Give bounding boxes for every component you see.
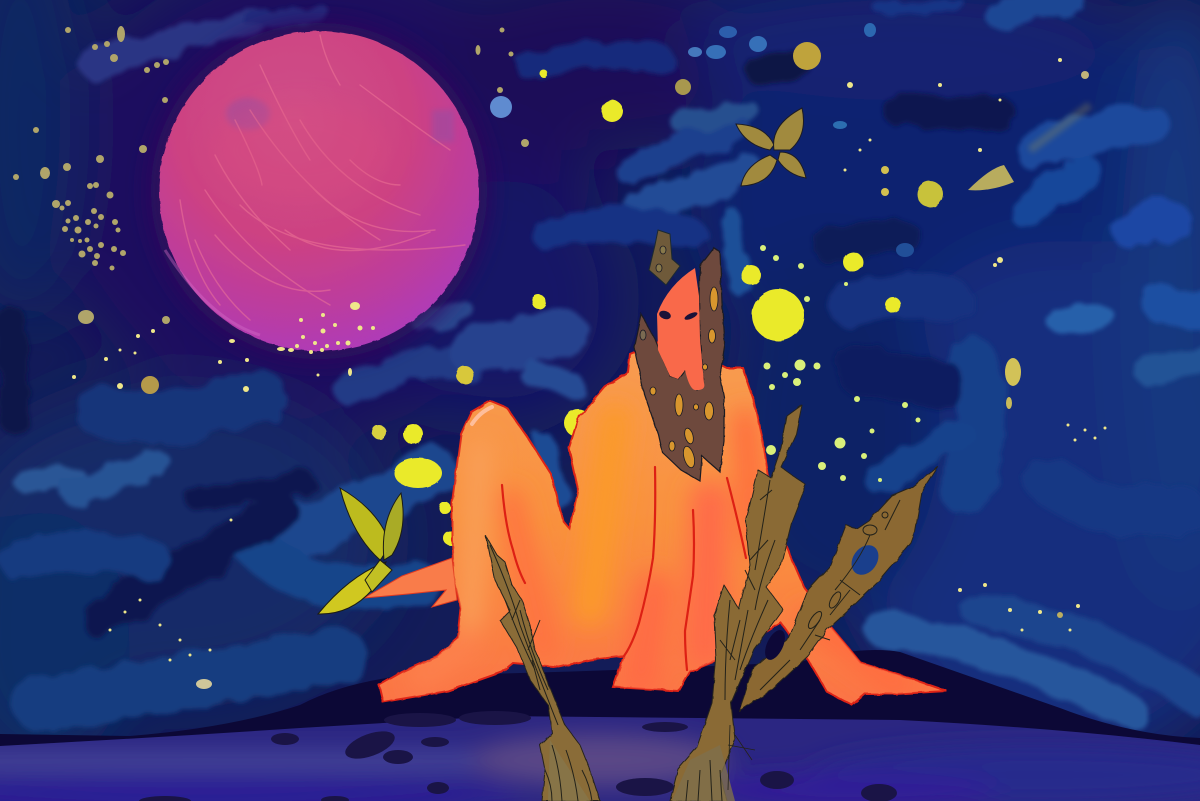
arm	[364, 558, 457, 607]
plant: right stalks	[670, 405, 938, 801]
stars: yellow glowing orbs	[372, 70, 943, 545]
body	[379, 339, 947, 705]
knee highlight	[472, 407, 492, 424]
back horn	[649, 230, 680, 285]
beard	[634, 248, 725, 481]
figure: seated orange creature	[364, 230, 947, 705]
moon glow	[151, 23, 487, 359]
butterfly: yellow near hand	[318, 488, 403, 614]
stalk: base tuft	[672, 745, 735, 801]
body colour washes	[420, 420, 900, 685]
ground	[0, 716, 1200, 801]
moon	[159, 31, 479, 351]
feather marks	[686, 480, 900, 801]
stalk: right leaning	[739, 467, 938, 711]
head	[657, 268, 704, 390]
eyes	[658, 309, 698, 321]
red contour lines	[502, 467, 746, 670]
stalk: tall centre	[670, 405, 806, 801]
hill silhouette	[0, 650, 1200, 760]
ground: stones	[139, 711, 897, 801]
stars: tan dust on the left	[13, 26, 821, 394]
plant: left stalk	[486, 536, 600, 801]
gap and hole	[761, 627, 789, 663]
stars: bright flecks under the moon	[72, 58, 1106, 689]
beard spots	[640, 246, 718, 469]
butterfly: tan upper right	[736, 108, 806, 186]
stars: pale blue blobs	[490, 23, 914, 257]
stars: small green-yellow sparkles	[760, 245, 920, 482]
